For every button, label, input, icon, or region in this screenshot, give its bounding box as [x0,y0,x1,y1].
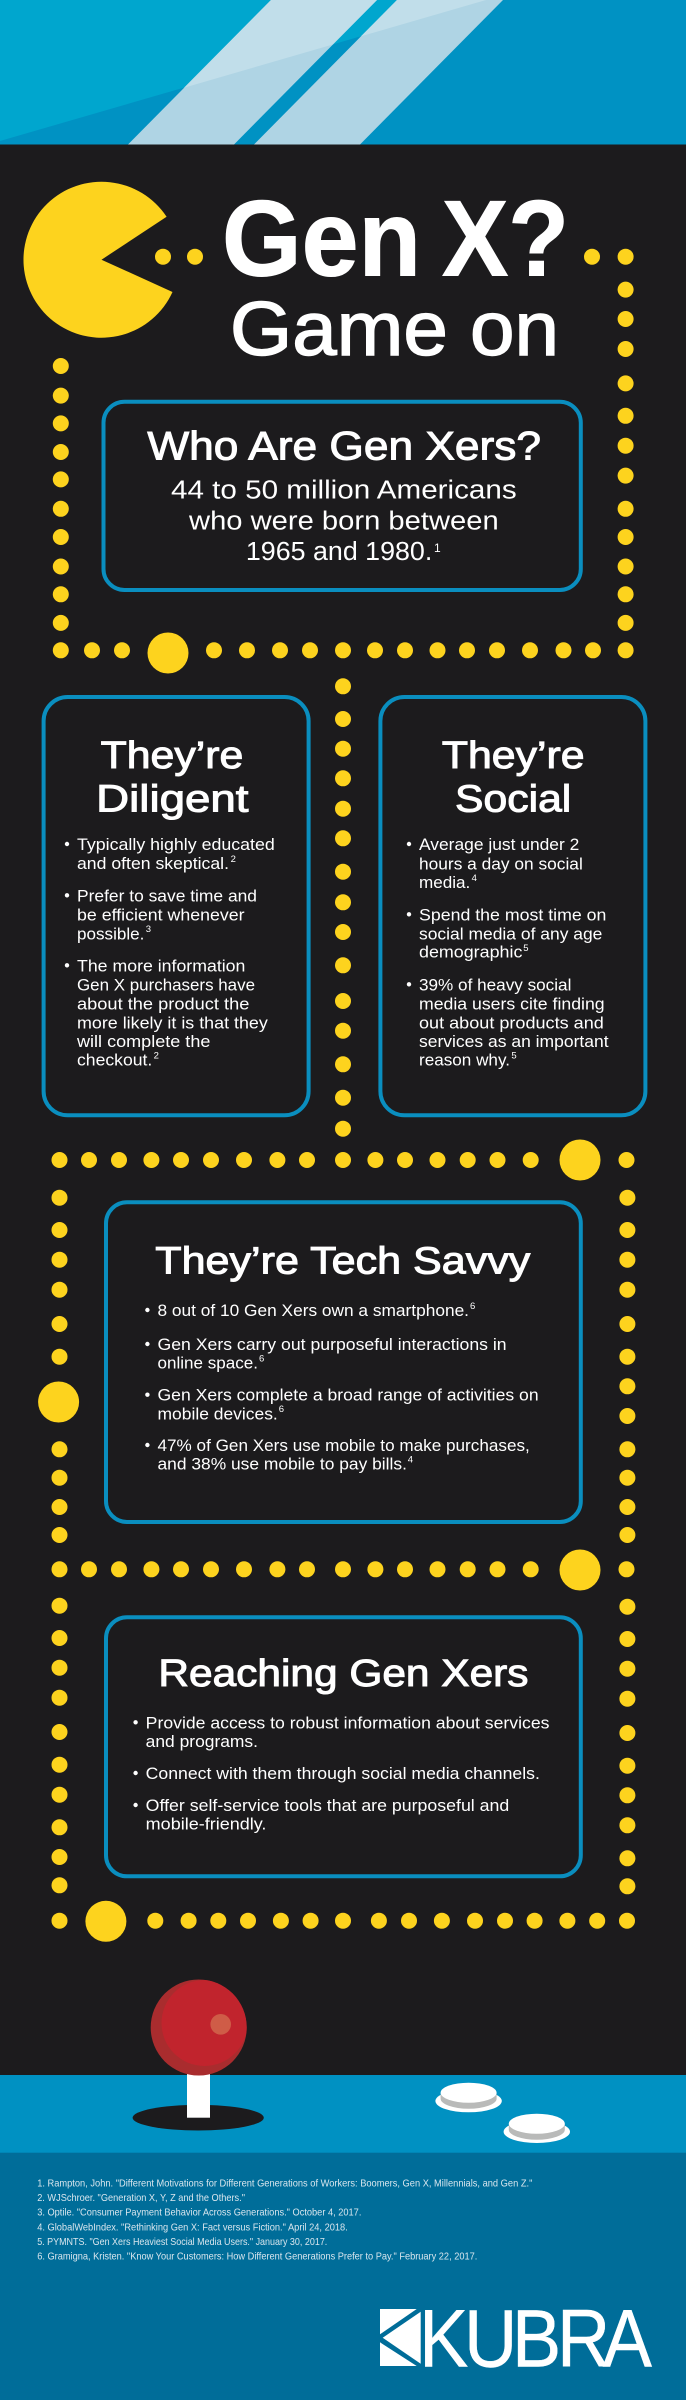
bullet list: reaching: Offer self-service tools that are purposeful and [146,1797,509,1815]
bullet list: diligent: more likely it is that they [77,1014,269,1032]
arcade control deck [0,2075,686,2153]
citations: 2. WJSchroer. "Generation X, Y, Z and the Others." [37,2192,245,2204]
heading: they're diligent: They’re [101,735,243,777]
bullet list: diligent [65,836,275,1070]
bullet list: diligent: will complete the [76,1033,210,1051]
bullet list: reaching: and programs. [146,1733,258,1751]
bullet list: reaching: Provide access to robust information about services [146,1714,549,1732]
panel: they're tech savvy [106,1202,581,1522]
dot trail: top section [53,249,634,674]
citations [37,2178,533,2263]
bullet list: diligent: 3 [146,924,151,935]
panel: who are gen xers [104,402,581,590]
citations: 5. PYMNTS. "Gen Xers Heaviest Social Media Users." January 30, 2017. [37,2236,327,2248]
bullet list: social: reason why. [419,1052,510,1070]
bullet list: tech savvy: 8 out of 10 Gen Xers own a smartphone. [158,1302,469,1320]
bullet list: tech savvy: 4 [408,1454,413,1466]
panel: they're social [380,697,645,1115]
bullet list: social: 5 [511,1050,517,1062]
bullet list: diligent: 2 [154,1050,159,1062]
footer band [0,2153,686,2400]
citations: 4. GlobalWebIndex. "Rethinking Gen X: Fact versus Fiction." April 24, 2018. [37,2221,348,2233]
dot trail: tech savvy section [38,1140,635,1590]
description: 1 [434,541,441,555]
title [222,178,569,372]
bullet list: diligent: checkout. [77,1052,152,1070]
bullet list: tech savvy: 47% of Gen Xers use mobile to make purchases, [158,1437,530,1455]
description: 1965 and 1980. [246,538,432,566]
bullet list: reaching: mobile-friendly. [146,1816,266,1834]
heading: they're tech savvy: They’re Tech Savvy [155,1241,530,1283]
header: blue banner with light stripes [0,0,686,144]
icon: joystick [133,1980,264,2130]
bullet list: social: Average just under 2 [419,836,579,854]
bullet list: tech savvy: 6 [470,1301,475,1312]
title: X? [442,178,569,298]
bullet list: social: 5 [523,943,528,954]
citations: 6. Gramigna, Kristen. "Know Your Customers: How Different Generations Prefer to Pay." February 22, 2017. [37,2251,477,2263]
bullet list: social: 4 [472,873,477,884]
bullet list: tech savvy: 6 [259,1354,264,1364]
bullet list: social: social media of any age [419,925,602,943]
citations: 3. Optile. "Consumer Payment Behavior Across Generations." October 4, 2017. [37,2207,361,2219]
heading: they're social: They’re [442,735,584,777]
heading: who are gen xers: Who Are Gen Xers? [147,425,541,469]
bullet list: diligent: 2 [231,854,236,865]
heading: they're social [442,735,584,821]
bullet list: social: hours a day on social [419,855,583,873]
bullet list: tech savvy: Gen Xers complete a broad range of activities on [158,1387,539,1405]
description: 44 to 50 million Americans [171,477,517,505]
bullet list: reaching: Connect with them through social media channels. [146,1765,540,1783]
bullet list: tech savvy: Gen Xers carry out purposeful interactions in [158,1336,507,1354]
bullet list: social: demographic [419,944,522,962]
bullet list: social: Spend the most time on [419,906,606,924]
citations: 1. Rampton, John. "Different Motivations for Different Generations of Workers: Boomers, Gen X, Millennials, and Gen Z." [37,2178,533,2190]
bullet list: diligent: and often skeptical. [77,855,229,873]
logo: kubra: KUBRA [419,2292,652,2384]
bullet list: social: media. [419,874,470,892]
bullet list: social: 39% of heavy social [419,976,571,994]
icon: pac-man [23,182,173,338]
bullet list: diligent: possible. [77,925,144,943]
bullet list: social: out about products and [419,1014,604,1032]
dot trail: reaching section [52,1598,635,1942]
description: who were born between [188,508,499,536]
bullet list: reaching [133,1714,549,1834]
bullet list: diligent: be efficient whenever [77,906,245,924]
bullet list: diligent: Prefer to save time and [77,887,257,905]
description [171,477,517,566]
heading: they're social: Social [455,779,571,821]
panel: reaching gen xers [106,1617,581,1876]
bullet list: diligent: Typically highly educated [77,836,275,854]
bullet list: diligent: The more information [77,957,245,975]
panel: they're diligent [44,697,309,1115]
bullet list: tech savvy: online space. [158,1355,258,1373]
title: Gen [222,178,421,298]
bullet list: tech savvy [145,1301,539,1474]
bullet list: social: services as an important [419,1033,609,1051]
dot trail: centre column [335,678,351,1137]
heading: reaching gen xers: Reaching Gen Xers [158,1653,528,1695]
heading: they're diligent: Diligent [96,779,249,821]
bullet list: tech savvy: mobile devices. [158,1405,278,1423]
icon: arcade button 1 [435,2083,502,2112]
bullet list: social: media users cite finding [419,995,605,1013]
bullet list: tech savvy: 6 [279,1404,284,1415]
bullet list: social [407,836,609,1070]
heading: they're diligent [96,735,249,821]
title: Game on [230,287,559,372]
bullet list: diligent: about the product the [77,995,249,1013]
bullet list: tech savvy: and 38% use mobile to pay bills. [158,1456,407,1474]
bullet list: diligent: Gen X purchasers have [77,976,255,994]
icon: arcade button 2 [504,2114,570,2143]
